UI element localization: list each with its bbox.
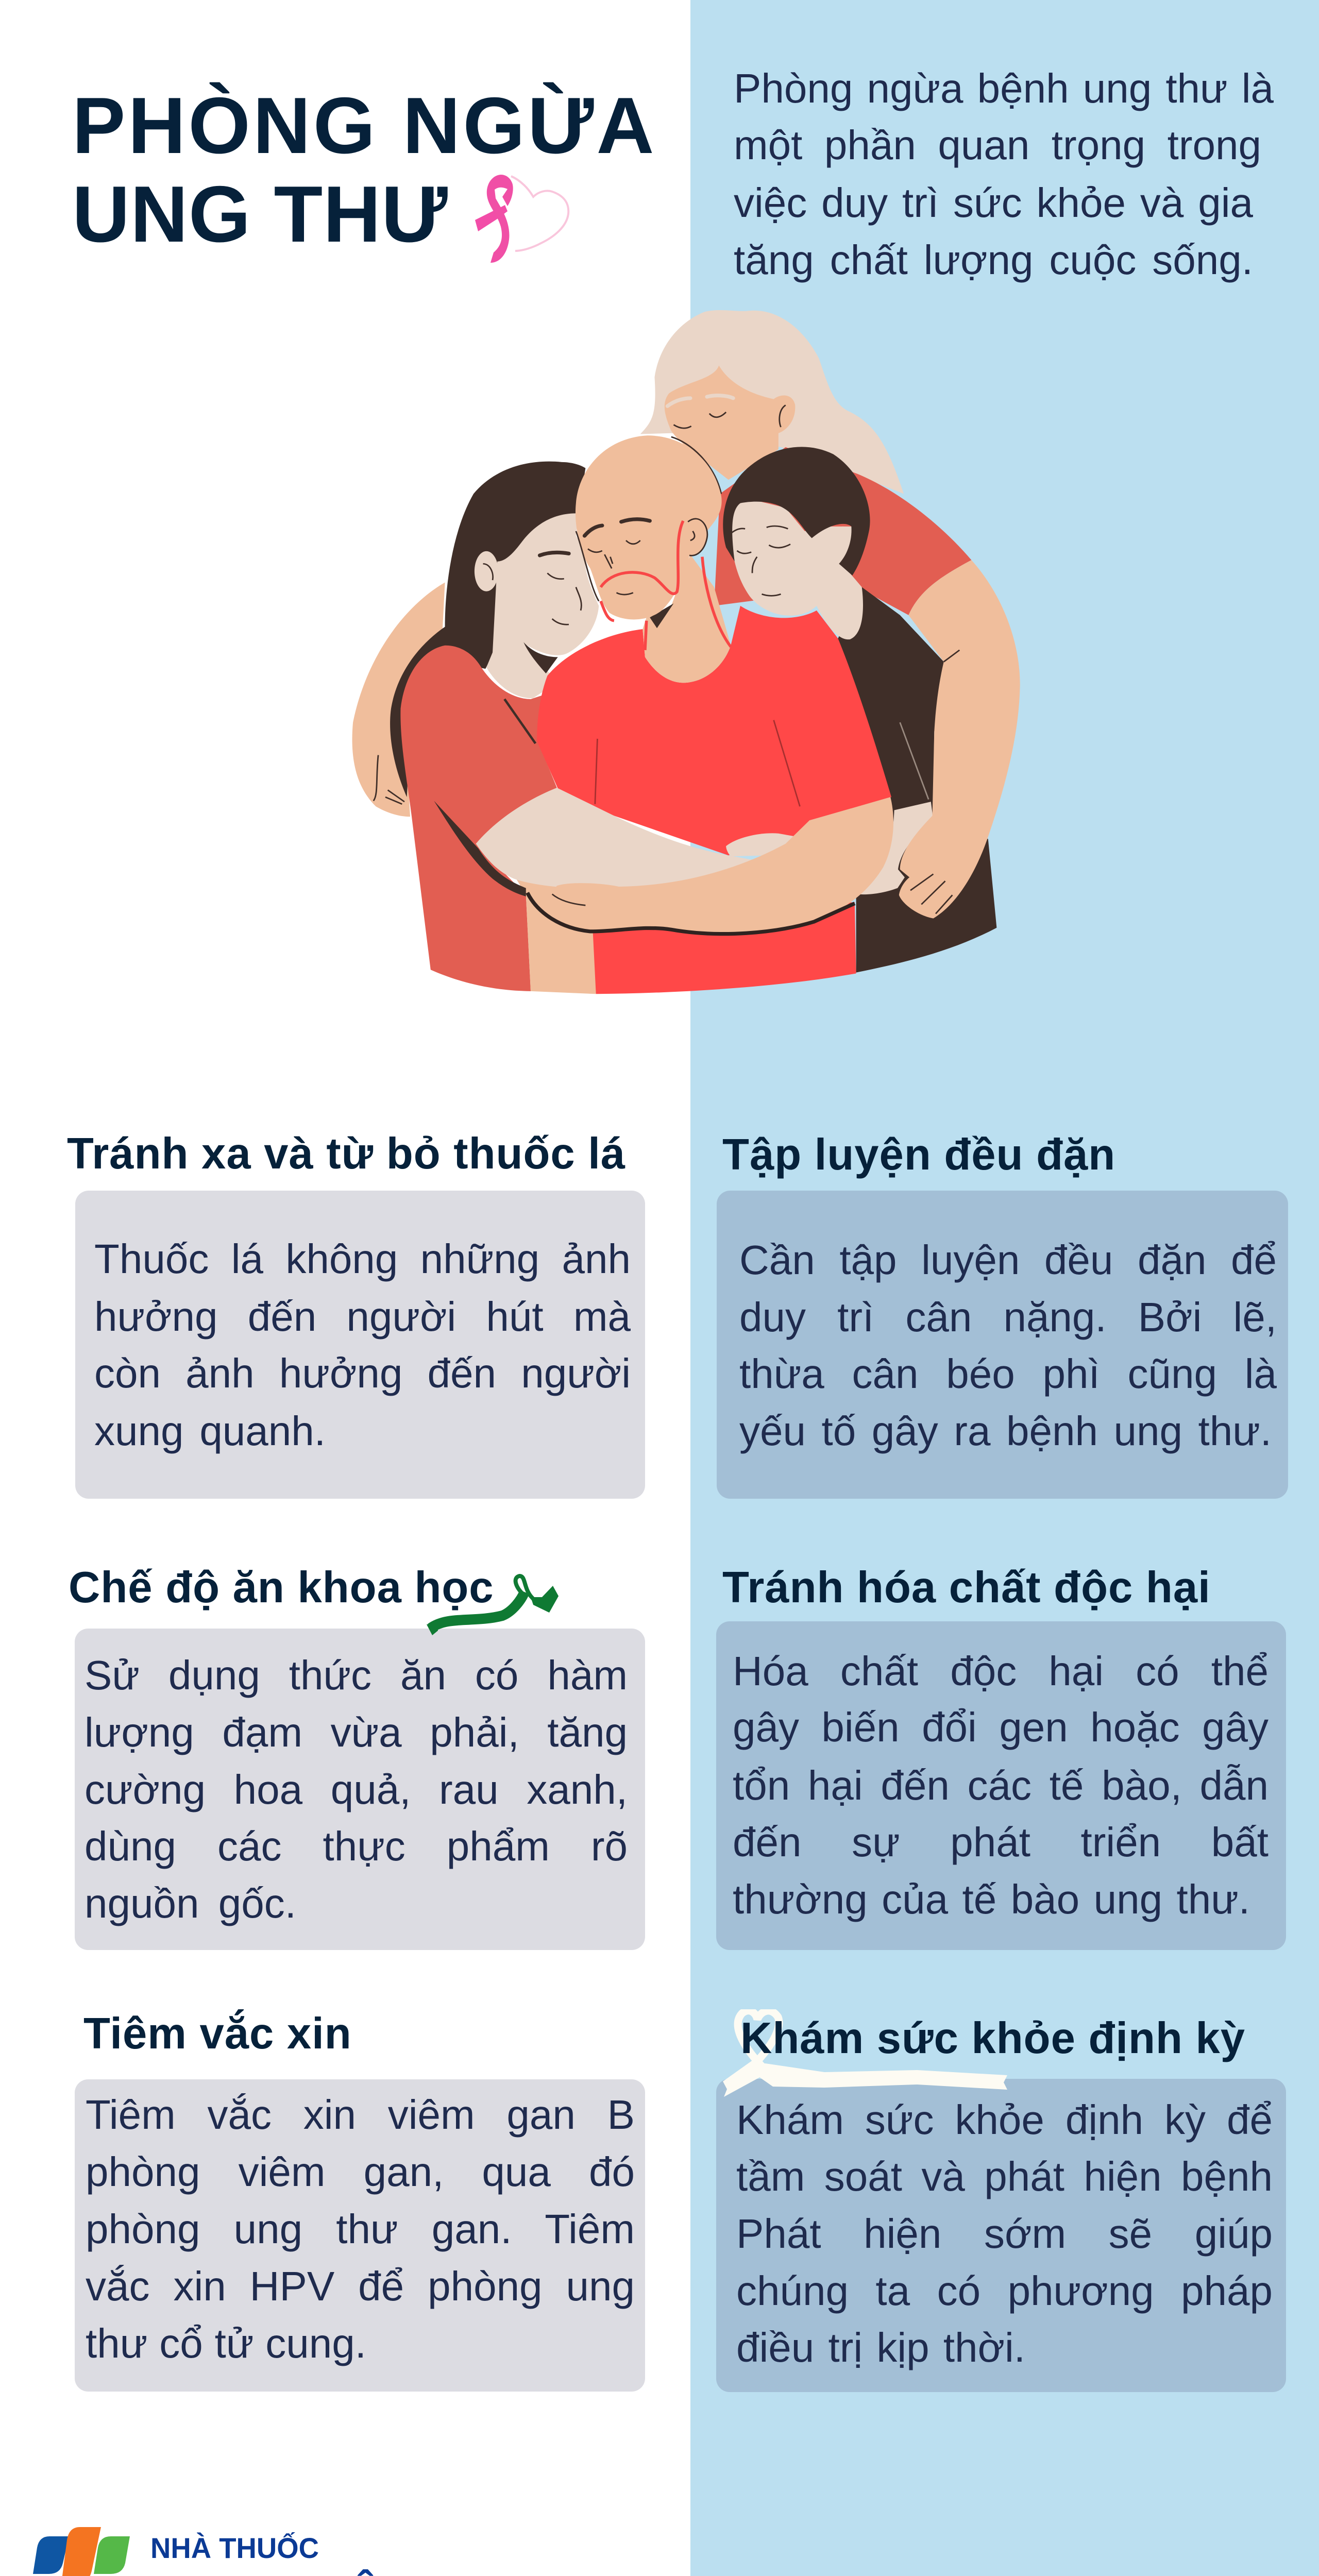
card background	[75, 1191, 645, 1499]
boy head	[723, 447, 928, 800]
grandmother left arm	[352, 583, 445, 817]
body line 5: nguồn gốc.	[84, 1880, 296, 1926]
chin shadow	[650, 603, 673, 628]
grandmother head	[665, 365, 795, 494]
panel: right blue background	[690, 0, 1319, 2576]
card background	[75, 2079, 645, 2392]
body line 4: vắc xin HPV để phòng ung	[86, 2263, 635, 2309]
intro paragraph	[734, 65, 1274, 283]
body line 2: hưởng đến người hút mà	[94, 1294, 631, 1340]
icon: white ribbon	[716, 2009, 1286, 2392]
card background	[716, 1621, 1286, 1950]
body line 1: Cần tập luyện đều đặn để	[739, 1237, 1277, 1283]
body line 4: xung quanh.	[94, 1408, 326, 1454]
body line 3: phòng ung thư gan. Tiêm	[86, 2206, 635, 2252]
man head	[576, 435, 722, 619]
body line 1: Thuốc lá không những ảnh	[94, 1236, 631, 1282]
boy black shirt	[838, 587, 996, 973]
panel: vaccination	[75, 2008, 645, 2392]
panel: avoid tobacco	[67, 1128, 645, 1499]
girl arm hugging	[434, 788, 805, 896]
intro line 2: một phần quan trọng trong	[734, 122, 1261, 168]
illustration: family hugging patient	[352, 310, 1020, 994]
oxygen tube	[601, 521, 731, 650]
body line 4: dùng các thực phẩm rõ	[84, 1823, 628, 1869]
body line 1: Tiêm vắc xin viêm gan B	[86, 2092, 635, 2138]
heading: Tránh hóa chất độc hại	[722, 1563, 1211, 1612]
icon: green ribbon	[69, 1562, 645, 1950]
body line 5: thư cổ tử cung.	[86, 2320, 366, 2366]
man arm	[528, 797, 893, 934]
grandmother hair	[640, 310, 904, 494]
body line 2: gây biến đổi gen hoặc gây	[733, 1704, 1269, 1750]
body line 5: điều trị kịp thời.	[736, 2325, 1025, 2370]
grandmother right arm and hand	[374, 560, 1020, 919]
icon: pink ribbon with heart	[475, 175, 570, 263]
body line 4: yếu tố gây ra bệnh ung thư.	[739, 1408, 1272, 1454]
intro line 1: Phòng ngừa bệnh ung thư là	[734, 65, 1274, 111]
body line 3: Phát hiện sớm sẽ giúp	[736, 2211, 1273, 2257]
body line 1: Sử dụng thức ăn có hàm	[84, 1652, 628, 1698]
body line 2: tầm soát và phát hiện bệnh	[736, 2154, 1273, 2199]
heading: Tiêm vắc xin	[83, 2009, 352, 2058]
intro line 3: việc duy trì sức khỏe và gia	[734, 180, 1253, 226]
panel: regular health checkups	[716, 2009, 1286, 2392]
girl shirt	[400, 646, 557, 991]
title line 2: UNG THƯ	[72, 170, 448, 259]
body line 4: chúng ta có phương pháp	[736, 2268, 1273, 2314]
heading: Chế độ ăn khoa học	[69, 1563, 494, 1612]
body line 4: đến sự phát triển bất	[733, 1819, 1269, 1865]
body line 2: duy trì cân nặng. Bởi lẽ,	[739, 1294, 1277, 1340]
panel: scientific diet	[69, 1562, 645, 1950]
man neck	[642, 554, 731, 683]
body line 5: thường của tế bào ung thư.	[733, 1876, 1250, 1922]
heading: Tránh xa và từ bỏ thuốc lá	[67, 1129, 625, 1178]
logo: FPT Retail Nhà thuốc Long Châu	[31, 2524, 415, 2576]
card background	[717, 1191, 1288, 1499]
body line 2: lượng đạm vừa phải, tăng	[84, 1709, 628, 1755]
man red shirt	[537, 606, 891, 994]
girl shirt fold	[504, 699, 535, 743]
logo mark	[33, 2527, 130, 2576]
heading: Khám sức khỏe định kỳ	[740, 2014, 1245, 2063]
heading: Tập luyện đều đặn	[722, 1130, 1115, 1179]
body line 3: tổn hại đến các tế bào, dẫn	[733, 1762, 1269, 1808]
body line 1: Hóa chất độc hại có thể	[733, 1648, 1269, 1694]
body line 2: phòng viêm gan, qua đó	[86, 2149, 635, 2195]
brand line 1: NHÀ THUỐC	[150, 2532, 319, 2564]
body line 1: Khám sức khỏe định kỳ để	[736, 2097, 1273, 2143]
panel: regular exercise	[717, 1129, 1288, 1499]
body line 3: cường hoa quả, rau xanh,	[84, 1767, 628, 1812]
intro line 4: tăng chất lượng cuộc sống.	[734, 237, 1253, 283]
body line 3: còn ảnh hưởng đến người	[94, 1350, 631, 1396]
grandmother shirt	[714, 447, 971, 615]
card background	[75, 1629, 645, 1950]
body line 3: thừa cân béo phì cũng là	[739, 1351, 1277, 1397]
girl hair	[390, 462, 585, 797]
title line 1: PHÒNG NGỪA	[72, 81, 656, 170]
boy arm	[856, 802, 933, 894]
title	[72, 81, 656, 259]
skin between shirts	[509, 867, 596, 994]
panel: avoid toxic chemicals	[716, 1562, 1286, 1950]
girl face	[475, 513, 599, 698]
card background	[716, 2079, 1286, 2392]
